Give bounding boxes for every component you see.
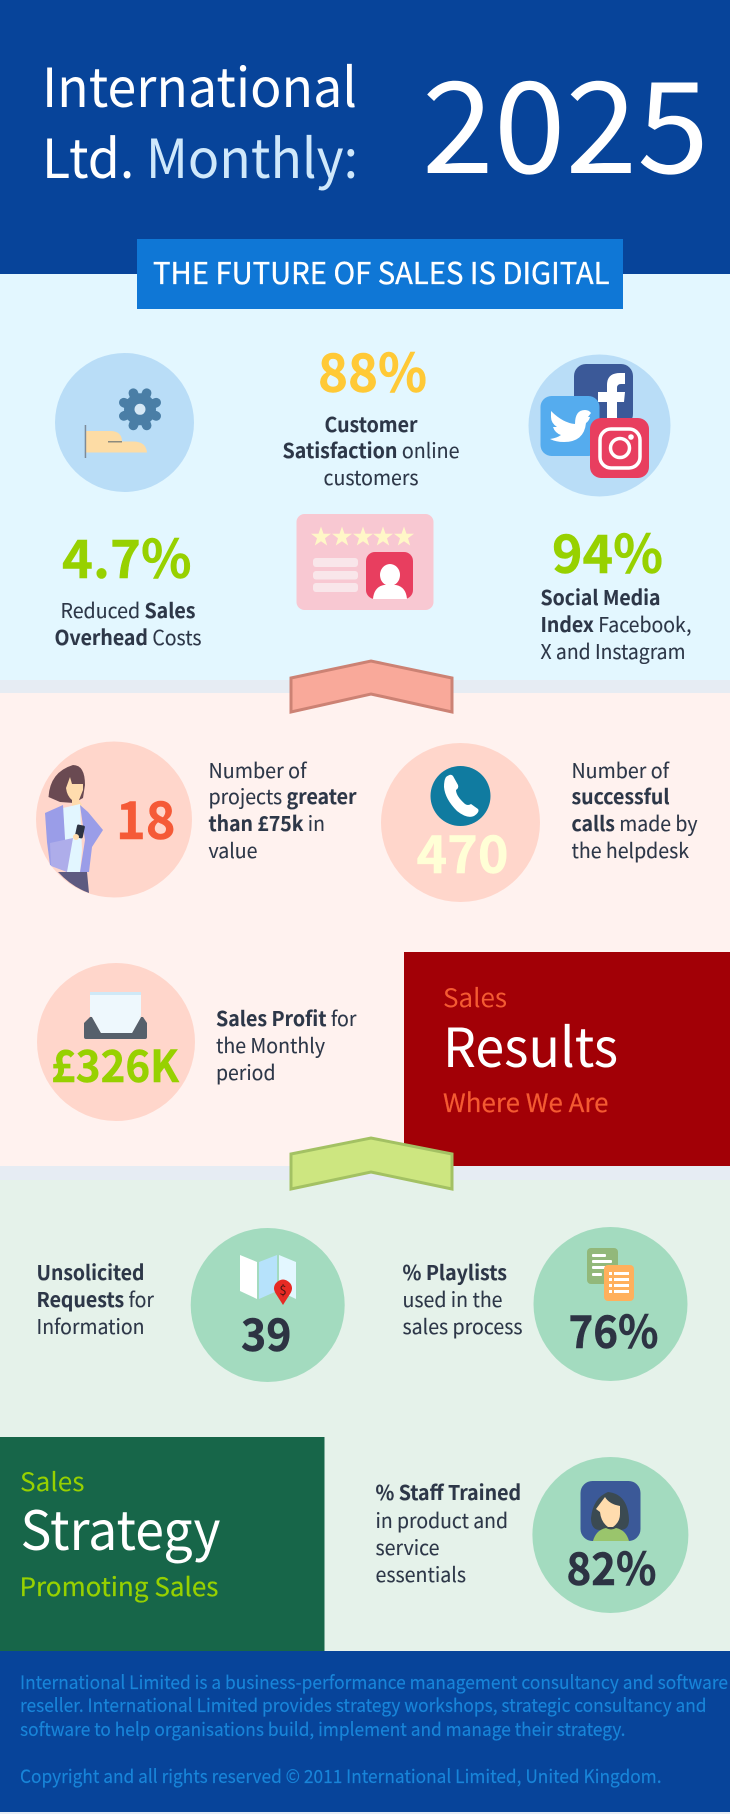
text: playlists: sales process	[402, 1310, 522, 1340]
text: profit description: period	[216, 1056, 276, 1086]
stat: calls: 470	[416, 813, 508, 888]
stat: playlists	[534, 1227, 688, 1381]
stat: sales overhead	[54, 518, 202, 651]
arrow: green chevron	[291, 1138, 452, 1189]
text: unsolicited requests: Information	[36, 1310, 144, 1340]
text: staff trained: % Staff Trained	[376, 1476, 521, 1506]
icon: documents	[587, 1248, 634, 1301]
stat: playlists: 76%	[568, 1296, 658, 1361]
text: calls description: the helpdesk	[572, 834, 690, 864]
banner	[137, 239, 623, 309]
stat: social media index: Index Facebook,	[540, 608, 692, 638]
text: unsolicited requests: Requests for	[36, 1283, 154, 1313]
icon: map with pin	[240, 1255, 296, 1305]
text: staff trained: essentials	[376, 1558, 466, 1588]
panel: sales strategy heading	[0, 1437, 324, 1651]
panel: strategy section background	[0, 1180, 730, 1651]
text: calls description	[572, 754, 698, 864]
text: playlists: used in the	[402, 1283, 502, 1313]
stat: sales overhead: Reduced Sales	[60, 594, 196, 624]
text: projects description: Number of	[208, 754, 308, 784]
stat: staff trained	[532, 1457, 688, 1613]
icon: rating card	[296, 514, 434, 610]
text: projects description: value	[208, 834, 258, 864]
text: projects description: than £75k in	[208, 807, 325, 837]
panel: sales results heading: Where We Are	[443, 1083, 608, 1120]
title: International	[42, 44, 357, 123]
text: calls description: successful	[572, 780, 670, 810]
text: playlists: % Playlists	[402, 1256, 507, 1286]
stat: customer satisfaction: customers	[324, 461, 418, 491]
panel: sales strategy heading: Sales	[20, 1462, 84, 1499]
icon: map with pin: $	[279, 1280, 287, 1299]
stat: sales profit: £326K	[51, 1031, 180, 1095]
text: projects description	[208, 754, 357, 864]
text: playlists	[402, 1256, 522, 1340]
text: unsolicited requests: Unsolicited	[36, 1256, 144, 1286]
panel: sales results heading	[404, 952, 730, 1166]
year: 2025	[422, 26, 709, 210]
stat: customer satisfaction: Customer	[324, 408, 418, 438]
icon: social media	[528, 354, 670, 496]
text: company description: software to help organisations build, implement and manage their strategy.	[20, 1716, 626, 1742]
text: company description	[20, 1669, 728, 1742]
panel: results section background	[0, 693, 730, 1166]
title: Ltd. Monthly:	[42, 115, 358, 194]
stat: projects: 18	[116, 779, 176, 854]
panel: sales results heading: Sales	[443, 978, 507, 1015]
stat: social media index	[540, 513, 692, 665]
icon: woman with phone	[45, 765, 103, 893]
stat: social media index: 94%	[552, 513, 663, 589]
stat: sales profit	[37, 963, 195, 1121]
text: staff trained: service	[376, 1531, 440, 1561]
icon: inbox tray	[84, 992, 147, 1039]
text: calls description: Number of	[572, 754, 670, 784]
icon: phone	[430, 766, 490, 826]
panel: sales strategy heading: Strategy	[20, 1487, 220, 1566]
panel: header	[0, 0, 730, 274]
text: copyright: Copyright and all rights reserved © 2011 International Limited, United Kingdom.	[20, 1763, 662, 1789]
text: projects description: projects greater	[208, 780, 357, 810]
stat: customer satisfaction: 88%	[318, 332, 427, 408]
stat: sales overhead: 4.7%	[62, 518, 192, 594]
panel: digital section background	[0, 274, 730, 680]
icon: hand with gear	[55, 353, 194, 492]
stat: projects	[36, 742, 192, 898]
stat: requests	[191, 1228, 345, 1382]
stat: calls	[381, 743, 540, 902]
text: profit description	[216, 1002, 357, 1086]
title	[42, 44, 358, 194]
stat: customer satisfaction	[282, 332, 460, 491]
stat: social media index: X and Instagram	[540, 635, 686, 665]
arrow: salmon chevron	[291, 661, 452, 712]
text: profit description: Sales Profit for	[216, 1002, 357, 1032]
text: profit description: the Monthly	[216, 1029, 325, 1059]
stat: customer satisfaction: Satisfaction online	[282, 434, 460, 464]
stat: staff trained: 82%	[566, 1533, 656, 1598]
text: staff trained: in product and	[376, 1504, 508, 1534]
stat: sales overhead: Overhead Costs	[54, 621, 202, 651]
text: staff trained	[376, 1476, 521, 1588]
panel: sales strategy heading: Promoting Sales	[20, 1567, 218, 1604]
icon: staff avatar	[580, 1481, 640, 1541]
text: calls description: calls made by	[572, 807, 698, 837]
panel: sales results heading: Results	[443, 1004, 618, 1083]
stat: social media index: Social Media	[540, 581, 660, 611]
panel: footer	[0, 1651, 730, 1814]
stat: requests: 39	[241, 1299, 292, 1364]
text: unsolicited requests	[36, 1256, 154, 1340]
banner: THE FUTURE OF SALES IS DIGITAL	[153, 249, 610, 293]
